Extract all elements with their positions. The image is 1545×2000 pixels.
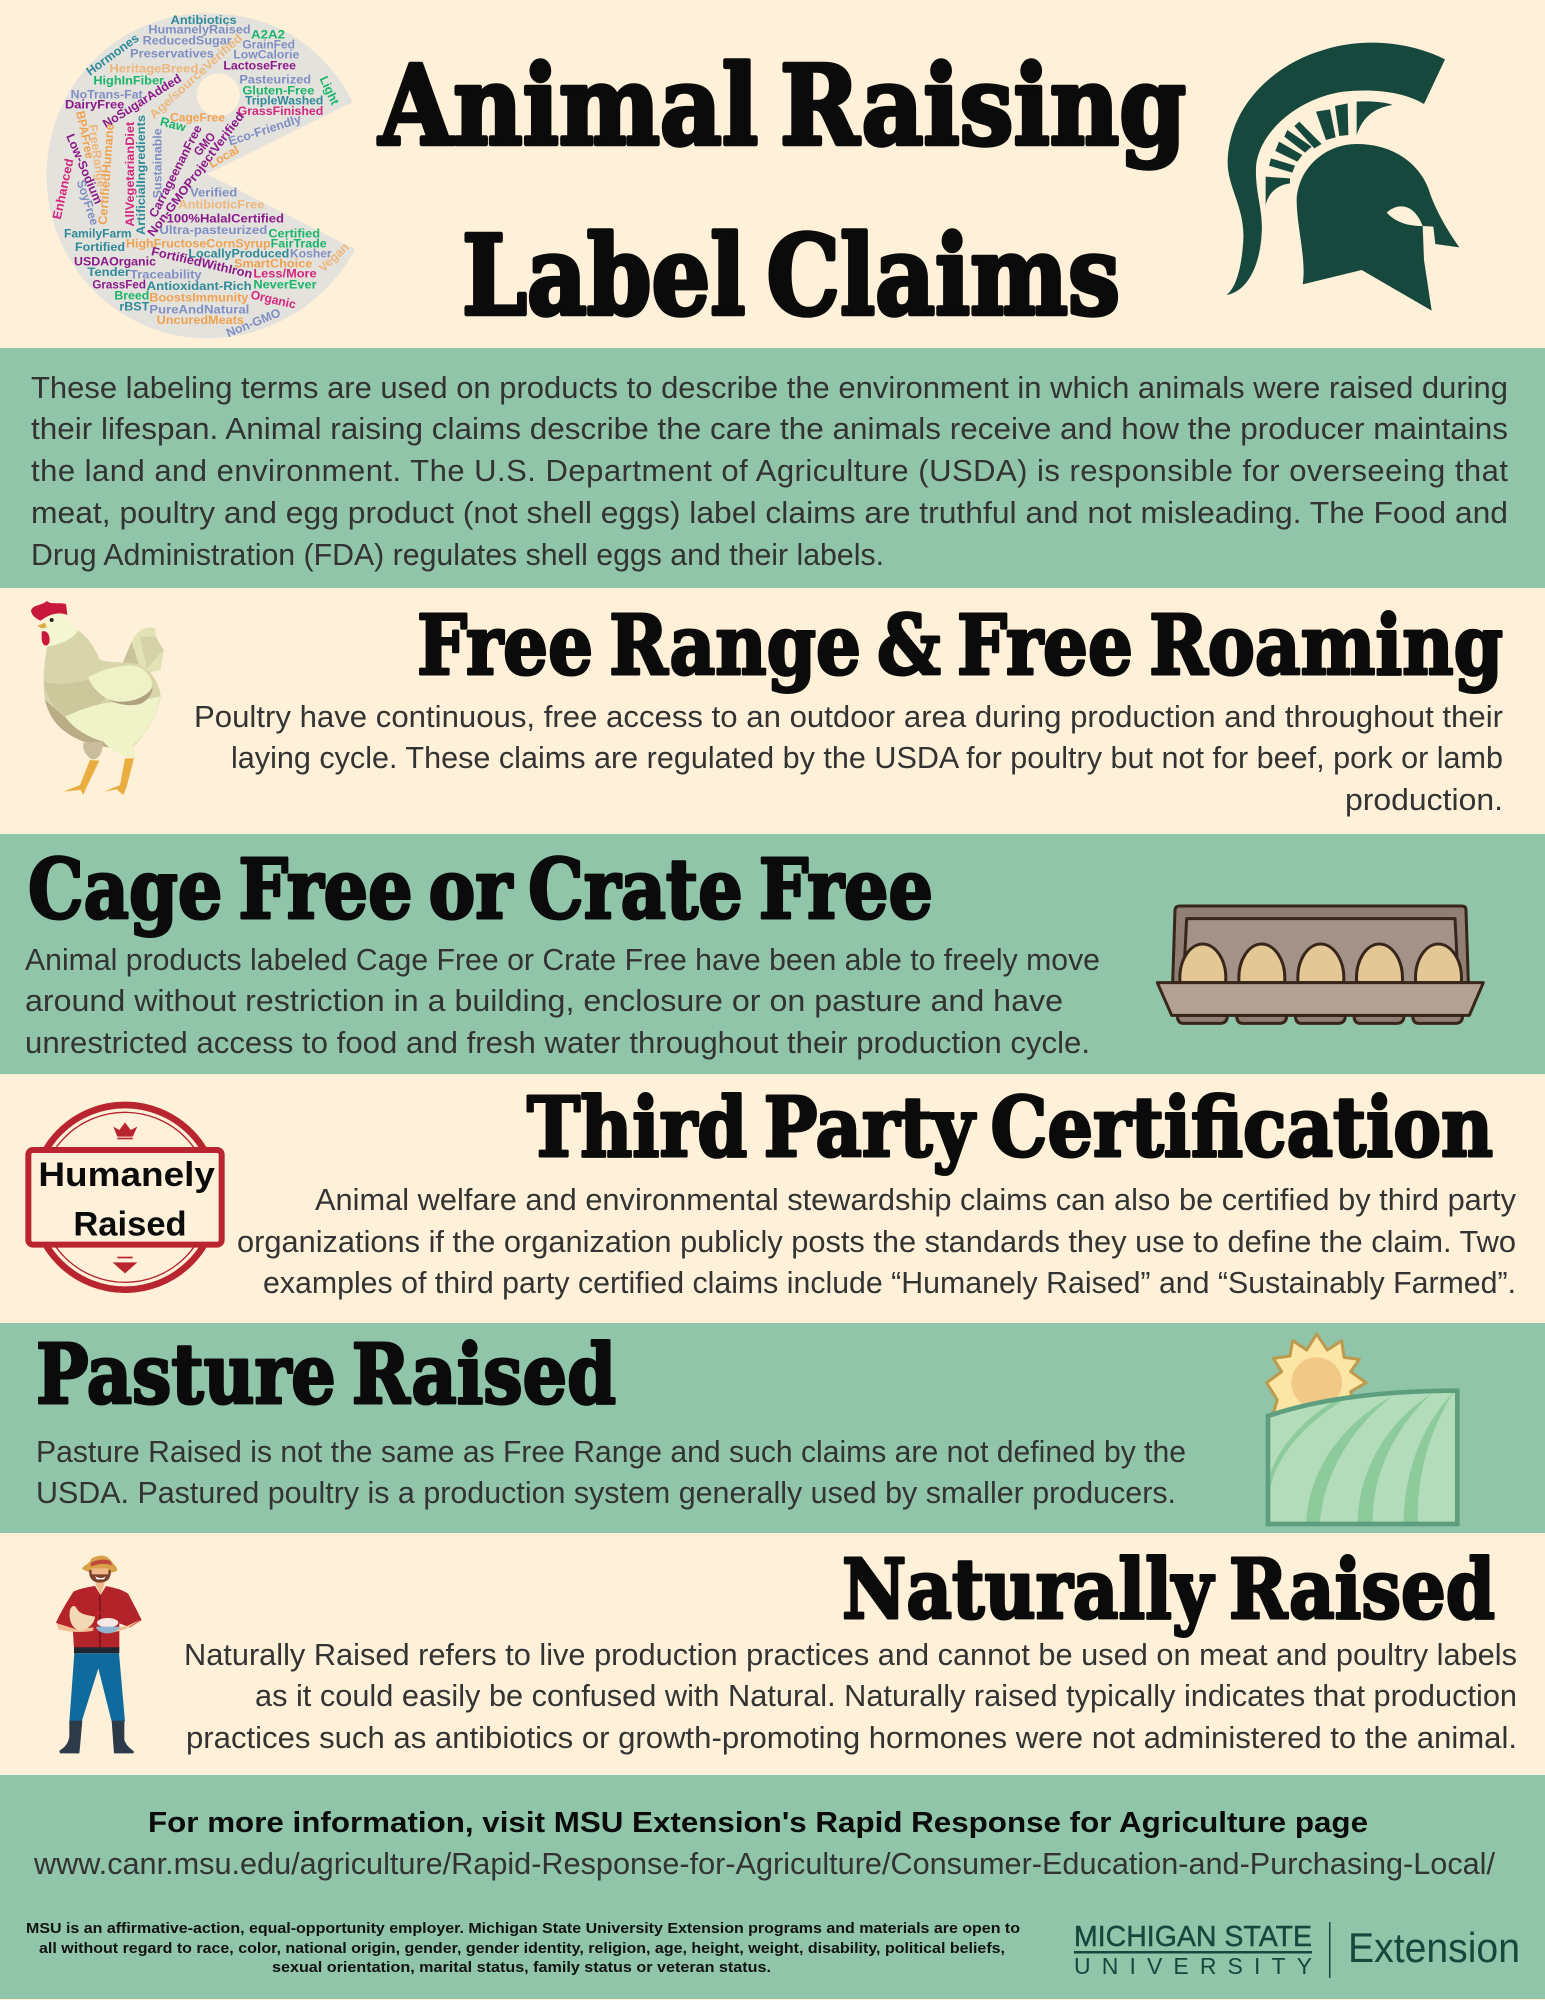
text block: url: www.canr.msu.edu/agriculture/Rapid-Response-for-Agriculture/Consumer-Education-and-Purchasing-Local/ [33,1846,1495,1881]
text block: intro paragraph: their lifespan. Animal raising claims describe the care the animals receive and how the producer maintains [31,411,1508,446]
icon: egg carton [1157,906,1483,1023]
text block: naturally raised description: as it could easily be confused with Natural. Naturally raised typically indicates that production [255,1678,1517,1713]
text block: third party description: Animal welfare and environmental stewardship claims can also be certified by third party [315,1182,1516,1217]
word cloud icon: claims pacman: GrainFed [242,37,295,51]
word cloud icon: claims pacman: HumanelyRaised [148,22,251,36]
word cloud icon: claims pacman: Verified [190,186,237,200]
title: Animal Raising [378,41,1186,170]
text block: pasture raised description: Pasture Raised is not the same as Free Range and such claims are not defined by the [36,1434,1186,1469]
text block: third party description: examples of third party certified claims include “Humanely Raised” and “Sustainably Farmed”. [263,1265,1516,1300]
word cloud icon: claims pacman: Fortified [75,240,125,254]
heading: more information: For more information, visit MSU Extension's Rapid Response for Agriculture page [148,1807,1368,1839]
word cloud icon: claims pacman: Light [317,74,342,107]
word cloud icon: claims pacman: LactoseFree [223,58,296,72]
text block: disclaimer: sexual orientation, marital status, family status or veteran status. [272,1960,771,1976]
word cloud icon: claims pacman: AllVegetarianDiet [123,122,137,227]
word cloud icon: claims pacman: BoostsImmunity [149,291,248,305]
word cloud icon: claims pacman: Non-GMOProjectVerified [145,110,247,239]
word cloud icon: claims pacman: NeverEver [253,277,317,291]
word cloud icon: claims pacman: AntibioticFree [178,197,264,211]
word cloud icon: claims pacman: rBST [119,300,150,314]
icon: field and sun [1267,1334,1457,1524]
word cloud icon: claims pacman: FairTrade [271,236,327,250]
text block: pasture raised description: USDA. Pastured poultry is a production system generally used by smaller producers. [36,1475,1176,1510]
word cloud icon: claims pacman: ReducedSugar [143,33,232,47]
word cloud icon: claims pacman: A2A2 [251,27,285,41]
word cloud icon: claims pacman: PureAndNatural [149,302,249,316]
icon: humanely raised badge [28,1105,222,1290]
text block: intro paragraph: Drug Administration (FDA) regulates shell eggs and their labels. [31,537,884,572]
logo: michigan state university extension [1074,1921,1520,1979]
text block: intro paragraph: the land and environment. The U.S. Department of Agriculture (USDA) is responsible for overseeing that [31,453,1508,488]
text block: naturally raised description: practices such as antibiotics or growth-promoting hormones were not administered to the animal. [186,1720,1517,1755]
word cloud icon: claims pacman: HighFructoseCornSyrup [126,237,271,251]
heading: cage free or crate free: Cage Free or Crate Free [28,842,933,938]
word cloud icon: claims pacman: FamilyFarm [64,227,132,241]
word cloud icon: claims pacman: GrassFinished [238,104,323,118]
word cloud icon: claims pacman: TripleWashed [245,93,323,107]
word cloud icon: claims pacman: FreeRange [86,123,108,188]
text block: naturally raised description: Naturally Raised refers to live production practices and cannot be used on meat and poultry labels [184,1637,1517,1672]
text block: cage free description [25,942,1100,1060]
panel: cage free band [0,834,1545,1074]
icon: spartan helmet logo [1227,43,1459,311]
word cloud icon: claims pacman: Gluten-Free [242,84,314,98]
word cloud icon: claims pacman: 100%HalalCertified [167,212,284,226]
word cloud icon: claims pacman: Preservatives [130,46,214,60]
panel: intro band [0,348,1545,588]
text block: disclaimer [26,1921,1020,1976]
word cloud icon: claims pacman: NoSugarAdded [100,71,184,131]
panel: pasture raised band [0,1323,1545,1533]
badge text [38,1156,216,1244]
word cloud icon: claims pacman: Eco-Friendly [227,112,303,149]
word cloud icon: claims pacman: SoyFree [74,178,102,227]
text block: disclaimer: all without regard to race, color, national origin, gender, gender identity, religion, age, height, weight, disability, political beliefs, [39,1941,1005,1957]
word cloud icon: claims pacman: Antibiotics [171,13,237,27]
word cloud icon: claims pacman: GMO [191,129,219,159]
logo: michigan state university extension: Extension [1348,1924,1520,1971]
word cloud icon: claims pacman: Tender [87,265,130,279]
word cloud icon: claims pacman: Enhanced [50,157,76,221]
word cloud icon: claims pacman: Pasteurized [239,72,311,86]
word cloud icon: claims pacman: FortifiedWithIron [150,244,254,281]
word cloud icon: claims pacman: NoTrans-Fat [71,87,143,101]
word cloud icon: claims pacman: LowCalorie [233,48,299,62]
text block: cage free description: unrestricted access to food and fresh water throughout their production cycle. [25,1025,1090,1060]
badge text: Humanely [38,1156,216,1194]
word cloud icon: claims pacman: HeritageBreed [109,62,198,76]
word cloud icon: claims pacman: BPAFree [73,110,97,160]
word cloud icon: claims pacman: Traceability [130,267,202,281]
word cloud icon: claims pacman: HighInFiber [93,73,164,87]
text block: cage free description: around without restriction in a building, enclosure or on pasture and have [25,983,1063,1018]
text block: intro paragraph: These labeling terms are used on products to describe the environment in which animals were raised during [31,370,1508,405]
word cloud icon: claims pacman: GrassFed [92,277,146,291]
text block: disclaimer: MSU is an affirmative-action, equal-opportunity employer. Michigan State University Extension programs and materials are open to [26,1921,1020,1937]
word cloud icon: claims pacman: CageFree [170,111,225,125]
word cloud icon: claims pacman: Raw [159,114,188,135]
logo: michigan state university extension: MICHIGAN STATE [1074,1921,1312,1953]
word cloud icon: claims pacman: CertifiedHumane [96,123,117,225]
text block: cage free description: Animal products labeled Cage Free or Crate Free have been able to freely move [25,942,1100,977]
icon: chicken [31,601,164,795]
heading: pasture raised: Pasture Raised [36,1327,616,1423]
word cloud icon: claims pacman: Antioxidant-Rich [147,279,252,293]
word cloud icon: claims pacman: Age/sourceVerified [147,31,245,122]
word cloud icon: claims pacman: Certified [268,226,320,240]
text block: intro paragraph [31,370,1508,572]
text block: free range description: Poultry have continuous, free access to an outdoor area during production and throughout their [194,699,1503,734]
icon: farmer [56,1556,142,1753]
word cloud icon: claims pacman: USDAOrganic [74,255,156,269]
title [378,41,1186,340]
badge text: Raised [73,1206,187,1244]
word cloud icon: claims pacman: Organic [249,288,297,312]
text block: intro paragraph: meat, poultry and egg product (not shell eggs) label claims are truthful and not misleading. The Food and [31,495,1508,530]
text block: free range description [194,699,1503,817]
word cloud icon: claims pacman: Low-Sodium [63,132,105,206]
word cloud icon: claims pacman: Vegan [316,240,352,275]
word cloud icon: claims pacman: Breed [114,288,149,302]
word cloud icon: claims pacman: Non-GMO [224,306,283,340]
word cloud icon: claims pacman: Less/More [253,267,317,281]
word cloud icon: claims pacman: Ultra-pasteurized [159,223,267,237]
text block: naturally raised description [184,1637,1517,1755]
text block: free range description: production. [1345,782,1503,817]
word cloud icon: claims pacman: CarrageenanFree [146,123,205,220]
text block: pasture raised description [36,1434,1186,1510]
word cloud icon: claims pacman: Kosher [290,246,332,260]
text block: free range description: laying cycle. These claims are regulated by the USDA for poultry but not for beef, pork or lamb [231,740,1503,775]
word cloud icon: claims pacman: Local [206,142,241,171]
title: Label Claims [462,211,1120,340]
text block: third party description: organizations if the organization publicly posts the standards they use to define the claim. Two [237,1224,1516,1259]
logo: michigan state university extension: UNIVERSITY [1074,1953,1312,1979]
panel: footer band [0,1775,1545,1999]
word cloud icon: claims pacman: LocallyProduced [188,246,289,260]
word cloud icon: claims pacman: Sustainable [151,128,165,198]
word cloud icon: claims pacman: DairyFree [65,97,124,111]
word cloud icon: claims pacman: Hormones [84,31,142,78]
text block: third party description [237,1182,1516,1300]
word cloud icon: claims pacman: SmartChoice [234,257,312,271]
word cloud icon: claims pacman: UncuredMeats [157,313,244,327]
word cloud icon: claims pacman: ArtificialIngredients [134,115,148,235]
word cloud icon: claims pacman [47,13,355,340]
